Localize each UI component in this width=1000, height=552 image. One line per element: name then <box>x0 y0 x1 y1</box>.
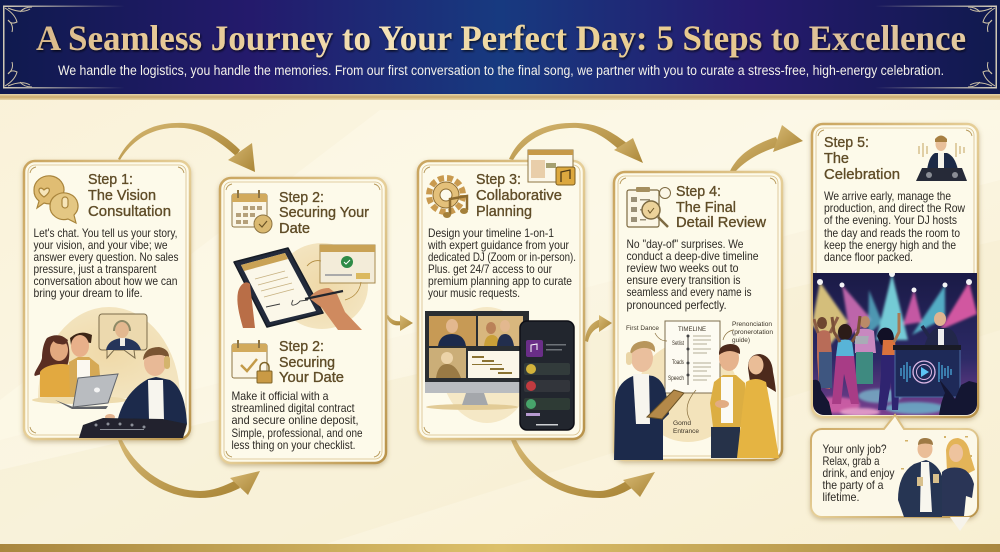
step 1 heading: Consultation <box>88 203 171 220</box>
step 5 heading <box>824 134 900 183</box>
step 3 body text: your music requests. <box>428 286 520 300</box>
step 3 body text: Design your timeline 1-on-1 <box>428 226 554 240</box>
step 4 body text: ensure every transition is <box>626 273 741 287</box>
step 3 heading: Planning <box>476 203 532 220</box>
step 2 body text: and secure online deposit, <box>232 413 358 427</box>
DJ <box>117 377 187 424</box>
step 3 body text: dedicated DJ (Zoom or in-person). <box>428 250 576 264</box>
callout text: the party of a <box>822 478 884 492</box>
step 5 heading: Celebration <box>824 166 900 183</box>
step 2 heading: Date <box>279 220 310 237</box>
step 3 body text <box>427 226 576 300</box>
icon: calendar with lock <box>232 340 272 383</box>
step 4 body text: conduct a deep-dive timeline <box>626 249 759 263</box>
step 1 body text: pressure, just a transparent <box>34 262 157 276</box>
header banner <box>0 0 1000 100</box>
timeline labels: Gomd <box>673 421 691 427</box>
step 1 heading <box>88 171 171 220</box>
timeline labels: Toads <box>672 360 684 366</box>
step 2 heading <box>279 189 369 237</box>
panel: step 1 <box>24 161 190 439</box>
third dancer <box>855 328 876 353</box>
timeline labels: (pronerotation <box>732 330 773 336</box>
step 2 body text: Make it official with a <box>232 389 329 403</box>
step 4 heading: Detail Review <box>676 214 766 231</box>
step 1 body text: your vision, and your vibe; we <box>34 238 168 252</box>
performer DJ <box>924 328 958 345</box>
second step 2 heading: Securing <box>279 354 335 371</box>
left dancer <box>838 324 852 340</box>
step 4 heading <box>676 183 766 231</box>
step 5 body text: We arrive early, manage the <box>824 189 951 203</box>
arrow: step 4 to step 5 <box>730 125 803 172</box>
timeline labels: guide) <box>732 338 750 344</box>
laptop <box>73 374 118 407</box>
illustration: tablet contract signing <box>234 243 375 330</box>
step 5 body text <box>824 189 965 264</box>
icon: calendar with check <box>232 190 272 233</box>
callout text <box>822 442 895 504</box>
step 2 body text: less thing on your checklist. <box>232 438 356 452</box>
step 3 body text: Plus. get 24/7 access to our <box>428 262 552 276</box>
hand left <box>237 282 255 328</box>
title: A Seamless Journey to Your Perfect Day: 5 Steps to Excellence <box>36 18 966 58</box>
callout text: lifetime. <box>822 490 860 504</box>
arrow: step 1 to step 2 bottom <box>118 440 260 498</box>
tile people <box>438 334 466 346</box>
DJ booth <box>895 349 960 397</box>
woman <box>34 335 69 376</box>
ornamental frame right <box>875 6 997 88</box>
step 2 heading: Securing Your <box>279 204 369 221</box>
step 1 heading: The Vision <box>88 187 156 204</box>
step 1 body text: conversation about how we can <box>34 274 178 288</box>
step 4 body text: No "day-of" surprises. We <box>626 237 744 251</box>
arrow: step 4 side <box>585 315 612 342</box>
icon: DJ at decks <box>916 136 967 181</box>
DJ with clipboard <box>614 374 669 460</box>
center dancer <box>877 328 894 346</box>
step 1 body text <box>34 226 179 300</box>
step 5 body text: the day and reads the room to <box>824 226 960 240</box>
illustration: dance floor party <box>810 271 977 416</box>
phone <box>520 321 574 430</box>
step 4 heading: The Final <box>676 199 736 216</box>
arrow: step 3 to step 4 bottom <box>511 440 655 498</box>
step 4 body text: seamless and every name is <box>626 285 752 299</box>
step 5 heading: The <box>824 150 849 167</box>
step 2 heading: Step 2: <box>279 189 324 206</box>
panel: step 2 <box>220 178 386 463</box>
step 1 body text: Let's chat. You tell us your story, <box>34 226 178 240</box>
footer bar <box>0 544 1000 552</box>
icon: checklist and magnifier <box>627 187 670 227</box>
arrow: step 1 to step 2 top <box>118 123 255 172</box>
man <box>70 333 92 345</box>
step 1 heading: Step 1: <box>88 171 133 188</box>
step 2 body text: Simple, professional, and one <box>232 426 363 440</box>
icon: planning window with music note <box>528 150 575 185</box>
arrow: step 3 to step 4 top <box>509 123 643 163</box>
second step 2 heading: Your Date <box>279 369 344 386</box>
callout: your only job <box>811 415 978 531</box>
woman <box>748 354 776 392</box>
arrow: step 2 to step 3 <box>386 315 413 331</box>
callout text: Relax, grab a <box>822 454 880 468</box>
timeline labels: Speech <box>668 376 684 382</box>
panel: step 3 <box>418 150 584 439</box>
panel: step 5 <box>810 124 978 417</box>
illustration: monitor video call and phone app <box>425 307 574 430</box>
icon: chat bubbles <box>34 176 78 223</box>
step 5 body text: dance floor packed. <box>824 250 913 264</box>
callout text: Your only job? <box>822 442 887 456</box>
hand right <box>309 288 362 330</box>
illustration: timeline review with couple <box>614 321 779 460</box>
step 5 body text: keep the energy high and the <box>824 238 956 252</box>
timeline labels: Entrance <box>673 429 700 435</box>
step 5 body text: of the evening. Your DJ hosts <box>824 213 957 227</box>
timeline labels: TIMELINE <box>678 327 706 333</box>
step 4 heading: Step 4: <box>676 183 721 200</box>
tablet <box>234 248 323 327</box>
icon: gear with music note <box>429 178 468 218</box>
callout text: drink, and enjoy <box>822 466 895 480</box>
step 3 heading <box>476 171 562 220</box>
foreground crowd silhouettes <box>813 380 832 415</box>
payment window <box>320 245 375 283</box>
illustration: couple and DJ on video call <box>32 307 187 438</box>
man <box>710 375 747 427</box>
timeline labels <box>626 322 773 435</box>
timeline labels: First Dance <box>626 326 660 332</box>
timeline labels: Setlist <box>672 341 684 347</box>
step 5 body text: production, and direct the Row <box>824 201 965 215</box>
timeline labels: Prenonciation <box>732 322 772 328</box>
step 4 body text <box>626 237 759 312</box>
step 4 body text: review two weeks out to <box>626 261 739 275</box>
DJ mixer <box>79 418 187 438</box>
step 1 body text: bring your dream to life. <box>34 286 142 300</box>
step 4 body text: pronounced perfectly. <box>626 298 726 312</box>
left guy <box>817 330 832 389</box>
step 5 heading: Step 5: <box>824 134 869 151</box>
step 2 body text <box>232 389 363 452</box>
step 3 heading: Collaborative <box>476 187 562 204</box>
video bubble <box>99 314 147 358</box>
step 3 body text: with expert guidance from your <box>427 238 569 252</box>
step 1 body text: answer every question. No sales <box>34 250 179 264</box>
step 2 body text: streamlined digital contract <box>232 401 355 415</box>
panel: step 4 <box>614 172 782 460</box>
illustration: guests with drinks <box>898 436 975 531</box>
step 3 heading: Step 3: <box>476 171 521 188</box>
second step 2 heading <box>279 338 344 386</box>
step 3 body text: premium planning app to curate <box>428 274 572 288</box>
second step 2 heading: Step 2: <box>279 338 324 355</box>
ornamental frame left <box>3 6 125 88</box>
